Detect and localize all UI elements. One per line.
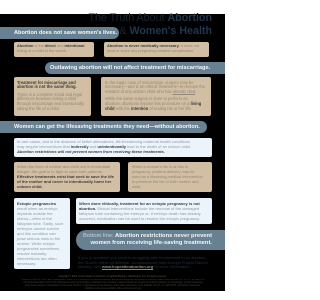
banner: abortion does not save lives: Abortion does not save women's lives. xyxy=(14,30,117,36)
card: ectopic pregnancies: result when an embryo xyxy=(17,206,57,211)
helpline text: Ministry. Visit www.hopeafterabortion.org for more information. xyxy=(78,264,191,269)
card: preterm delivery: child. xyxy=(132,184,141,189)
card: tragic miscarriage: necessary—and is an ethical treatment—to remove the xyxy=(105,84,205,89)
card: tragic miscarriage xyxy=(101,77,211,116)
card: ectopic treatment: When done ethically, treatment for an ectopic pregnancy is not xyxy=(79,201,200,206)
card: tragic miscarriage: remains of any unborn child who has already died. While the same surgery is done to perform an xyxy=(105,89,196,101)
card: never medically necessary xyxy=(104,42,209,56)
card: abortion definition xyxy=(14,42,94,56)
card: tragic miscarriage: In the tragic case of miscarriage, surgery may be xyxy=(105,80,194,84)
card: preterm delivery: used as a lifesaving medical intervention xyxy=(132,174,203,179)
card: preterm delivery: When a woman's life is at risk in xyxy=(132,164,188,169)
card: miscarriage vs abortion: Treatment for miscarriage and xyxy=(17,80,76,84)
helpline text: the Church offers confidential, compassionate help through Project Rachel xyxy=(78,260,208,265)
card: never medically necessary: Abortion is never medically necessary. It does not xyxy=(107,43,199,48)
footer copyright: Copyright © 2022, United States Conference of Catholic Bishops, Washington, DC. All rights reserved. xyxy=(58,275,167,278)
card: both lives: unborn child. xyxy=(17,184,43,189)
footer sources xyxy=(22,278,204,290)
card: both lives: danger, the goal is to fight to save both patients. xyxy=(17,169,103,174)
banner: outlawing abortion: Outlawing abortion will not affect treatment for miscarriage. xyxy=(50,65,210,71)
card: both lives xyxy=(14,162,120,192)
footer sources: and preterm delivery; Declaration on Procured Abortion, Congregation for the Doctrine of the Faith, Catechism of the Catholic Church, no. 2270-2275, and further references. xyxy=(25,285,201,287)
card: both lives: of the mother and never to intentionally harm her xyxy=(17,179,111,184)
card: never medically necessary: treat or solve any pregnancy-related complication. xyxy=(107,48,194,53)
title: The Truth About Abortion xyxy=(88,12,212,24)
footer sources: American Association of Pro-Life Obstetricians and Gynecologists; Charlotte Lozier Institute; maternal health fact sheets and clinical guidance on miscarriage, ectopic pregnancy xyxy=(23,282,203,284)
card: miscarriage vs abortion: difference between losing a child xyxy=(17,96,76,101)
card: ectopic pregnancies xyxy=(14,198,70,269)
card: ectopic pregnancies: Ectopic pregnancies xyxy=(17,201,56,206)
helpline text xyxy=(78,255,208,270)
card: ectopic pregnancies: necessary. xyxy=(17,261,36,266)
card: ectopic treatment xyxy=(76,198,212,224)
card: ectopic pregnancies: fallopian tube. Sadly, such xyxy=(17,221,63,226)
card: ectopic pregnancies: and this condition can xyxy=(17,231,56,236)
card: ectopic pregnancies: embryos cannot survive xyxy=(17,226,59,231)
card: ectopic treatment: occurred, medication can be used to resolve the ectopic pregnancy. xyxy=(79,216,200,221)
card: miscarriage vs abortion: taking the life of a child. xyxy=(17,106,60,111)
card: ectopic pregnancies: pregnancies sometimes xyxy=(17,246,59,251)
card: ectopic pregnancies: mother. While ectopic xyxy=(17,241,55,246)
card: tragic miscarriage: child with the intention of ending his or her life. xyxy=(105,106,192,111)
card: rare cases: In rare cases, and in the absence of better alternatives, life-threatening maternal health conditions xyxy=(17,139,190,144)
card: both lives: Effective treatments exist that seek to save the life xyxy=(17,174,114,179)
card: miscarriage vs abortion xyxy=(14,77,91,116)
card: miscarriage vs abortion: abortion is not the same thing. There is a complete moral and legal xyxy=(17,84,82,97)
card: ectopic pregnancies: resolve naturally, xyxy=(17,251,47,256)
card: preterm delivery: pregnancy, preterm delivery may be xyxy=(132,169,195,174)
card: ectopic pregnancies: interventions are often xyxy=(17,256,57,261)
card: ectopic treatment: abortion. Ethical interventions include the removal of the damaged xyxy=(79,206,199,211)
card: ectopic pregnancies: uterus—often in the xyxy=(17,216,52,221)
card: tragic miscarriage: abortion, abortions impose this procedure on a living xyxy=(105,101,201,106)
card: ectopic pregnancies: implants outside the xyxy=(17,211,53,216)
banner: bottom line xyxy=(76,230,225,250)
card: abortion definition: Abortion is the direct and intentional xyxy=(17,43,84,48)
card: both lives: When the lives of mother and child are in immediate xyxy=(17,164,110,169)
banner: bottom line: women from receiving life-saving treatment. xyxy=(91,240,212,246)
banner: bottom line: Bottom line: Abortion restrictions never prevent xyxy=(83,233,212,239)
footer sources: Sources: Pope St. John Paul II, Evangelium Vitae; U.S. Conference of Catholic Bishops, Ethical and Religious Directives for Catholic Health Care Services, no. 45, 47, 48; AAPLOG xyxy=(22,278,204,280)
black background xyxy=(0,14,225,290)
title xyxy=(88,12,212,37)
helpline text: If you or someone you know is struggling after involvement in an abortion, xyxy=(78,255,206,260)
card: ectopic treatment: fallopian tube containing the embryo or, if embryo death has already xyxy=(79,211,201,216)
banner: lifesaving treatments xyxy=(0,121,206,133)
card: preterm delivery: to preserve the life of both mother and xyxy=(132,179,199,184)
title: & Women's Health xyxy=(119,25,212,37)
footer sources: Additional references available online at www.usccb.org xyxy=(85,288,141,290)
card: preterm delivery xyxy=(128,162,212,192)
card: abortion definition: killing of a child in the womb. xyxy=(17,48,67,53)
card: rare cases: may require interventions that indirectly and unintentionally lead to the death of an unborn child. xyxy=(17,144,191,149)
card: rare cases: Abortion restrictions will not prevent women from receiving these treatments. xyxy=(17,149,165,154)
banner: abortion does not save lives xyxy=(0,27,119,39)
banner: outlawing abortion xyxy=(45,62,225,74)
card: ectopic pregnancies: pose serious risks to the xyxy=(17,236,60,241)
card: rare cases xyxy=(14,138,212,157)
banner: lifesaving treatments: Women can get the lifesaving treatments they need—without abortion. xyxy=(14,124,200,130)
card: miscarriage vs abortion: through miscarriage and intentionally xyxy=(17,101,84,106)
